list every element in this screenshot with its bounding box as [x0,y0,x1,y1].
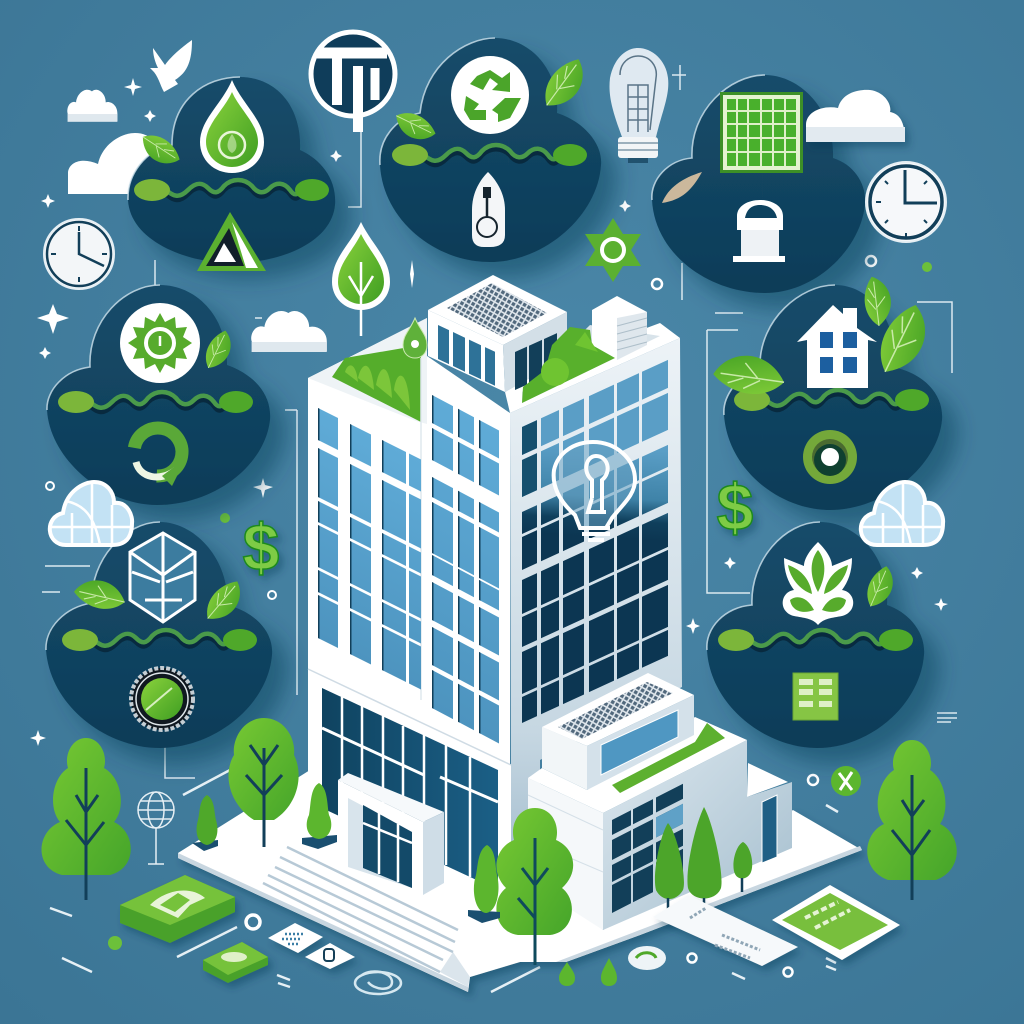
panel: leaf emblem blob [707,522,924,748]
shrubs and cypress [192,783,752,923]
icon: feather [662,172,702,203]
panel: house blob [711,276,942,510]
panel: solar blob [652,75,865,293]
icon: glass cloud left [50,482,132,545]
icon: money stack large [120,875,235,943]
panel: main tower right face [505,323,682,900]
icon: leaf [711,345,789,405]
icon: solar panel [720,92,803,173]
vine [58,391,253,413]
vine [134,179,329,201]
panel: annex building [528,673,792,930]
icon: symbol circle [311,32,395,132]
icon: cloud right [806,90,905,142]
roof garden left [332,345,421,422]
panel: gear blob [47,285,270,505]
icon: leaf [198,577,250,626]
icon: glass cloud right [861,482,943,545]
tree: left [42,738,131,900]
roof stack [592,296,647,360]
icon: globe [138,792,174,864]
tree: front [496,808,573,965]
icon: dove [150,40,192,92]
icon: green gear button [131,668,193,730]
building [308,275,792,930]
icon: dollar right: $ [717,470,753,544]
tree: middle left [228,718,299,847]
icon: cloud left [68,133,161,194]
icon: leaf [137,127,183,173]
vine [392,144,587,166]
icon: calculator [653,895,798,966]
panel: main tower left face [308,318,510,765]
icon: money stack small [203,942,268,983]
icon: leaf drop [332,222,390,336]
panel: cube blob [46,522,272,748]
icon: triangle [197,212,266,271]
icon: green star [585,218,641,282]
icon: leaf [197,328,239,373]
icon: cloud top left [67,90,117,122]
icon: swirl [355,971,401,994]
icon: green document [793,673,838,720]
icon: white cards [268,923,355,969]
icon: leaf [534,55,595,114]
panel: entrance canopy [338,773,444,895]
icon: gear [120,303,200,383]
small green drop icon [403,318,427,358]
icon: hexagon box [130,533,195,622]
icon: tablet [772,885,900,960]
icon: ring [803,430,857,484]
icon: drops [559,958,617,986]
penthouse [428,275,567,392]
left wing windows [318,408,421,690]
grass strip [612,723,725,793]
panel: water drop blob [128,77,335,271]
panel: lower facade [308,669,511,900]
icon: leaf emblem [783,542,853,625]
right roof garden [522,327,615,403]
icon: leaf [391,104,438,148]
icon: cloud center [251,311,327,352]
icon: building light bulb [554,442,635,540]
icon: leaf [72,571,129,618]
decorative lines and sparkles [30,78,948,976]
icon: water drop [200,80,264,173]
icon: leaf [859,564,902,611]
vine [718,629,913,651]
icon: padlock [733,200,785,262]
icon: house [797,305,877,388]
icon: clock left [44,219,114,289]
tree: right [867,740,957,900]
icon: clock right [866,162,946,242]
icon: cycle arrow [130,424,186,486]
icon: leaf [862,276,893,327]
icon: tag [472,172,505,247]
icon: dollar left: $ [243,510,279,584]
icon: recycle symbol [451,56,529,134]
panel: recycling blob [380,38,601,262]
vine [62,629,257,651]
icon: coin [628,946,666,970]
center column windows [432,395,499,744]
vine [734,389,929,411]
steps [263,847,458,972]
icon: leaf [866,300,941,381]
icon: badge [831,766,861,796]
plaza [178,770,862,992]
icon: light bulb [610,48,668,163]
